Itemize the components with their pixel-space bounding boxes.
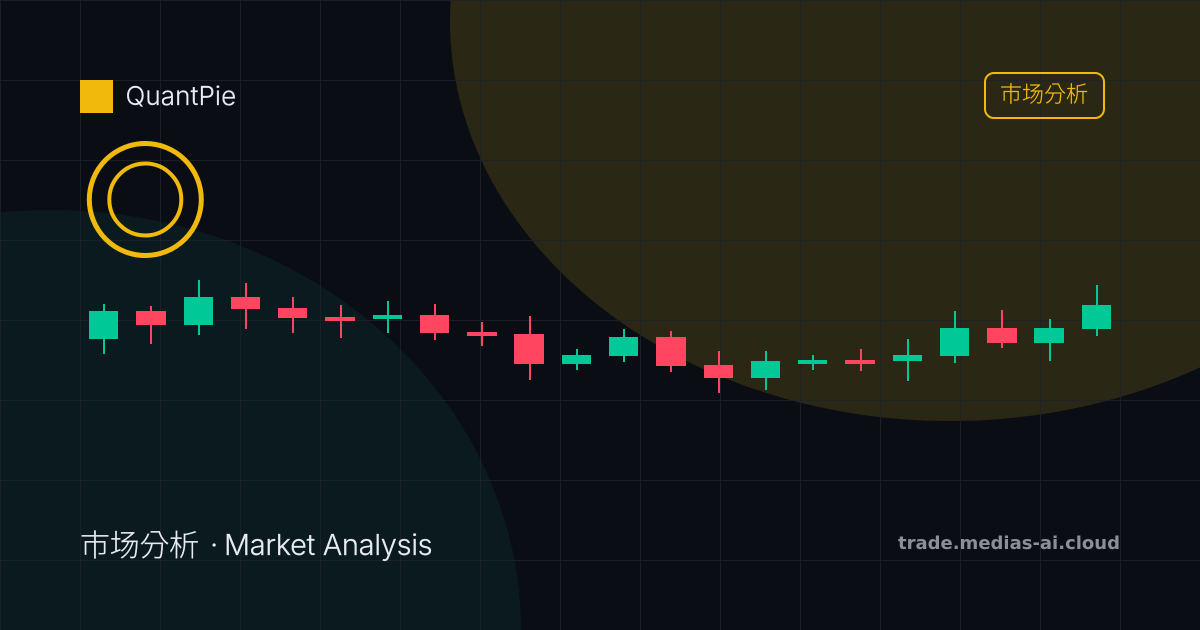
headline: 市场分析	[80, 528, 199, 564]
candlestick chart	[89, 280, 1111, 393]
headline: Market Analysis	[224, 527, 432, 562]
headline	[80, 527, 432, 564]
site url: trade.medias-ai.cloud	[898, 533, 1120, 554]
brand name: QuantPie	[126, 81, 236, 112]
badge: 市场分析	[1000, 82, 1088, 108]
badge	[984, 72, 1105, 119]
headline: ·	[210, 527, 218, 562]
icon: concentric gold rings	[89, 144, 201, 256]
logo mark	[80, 80, 113, 113]
